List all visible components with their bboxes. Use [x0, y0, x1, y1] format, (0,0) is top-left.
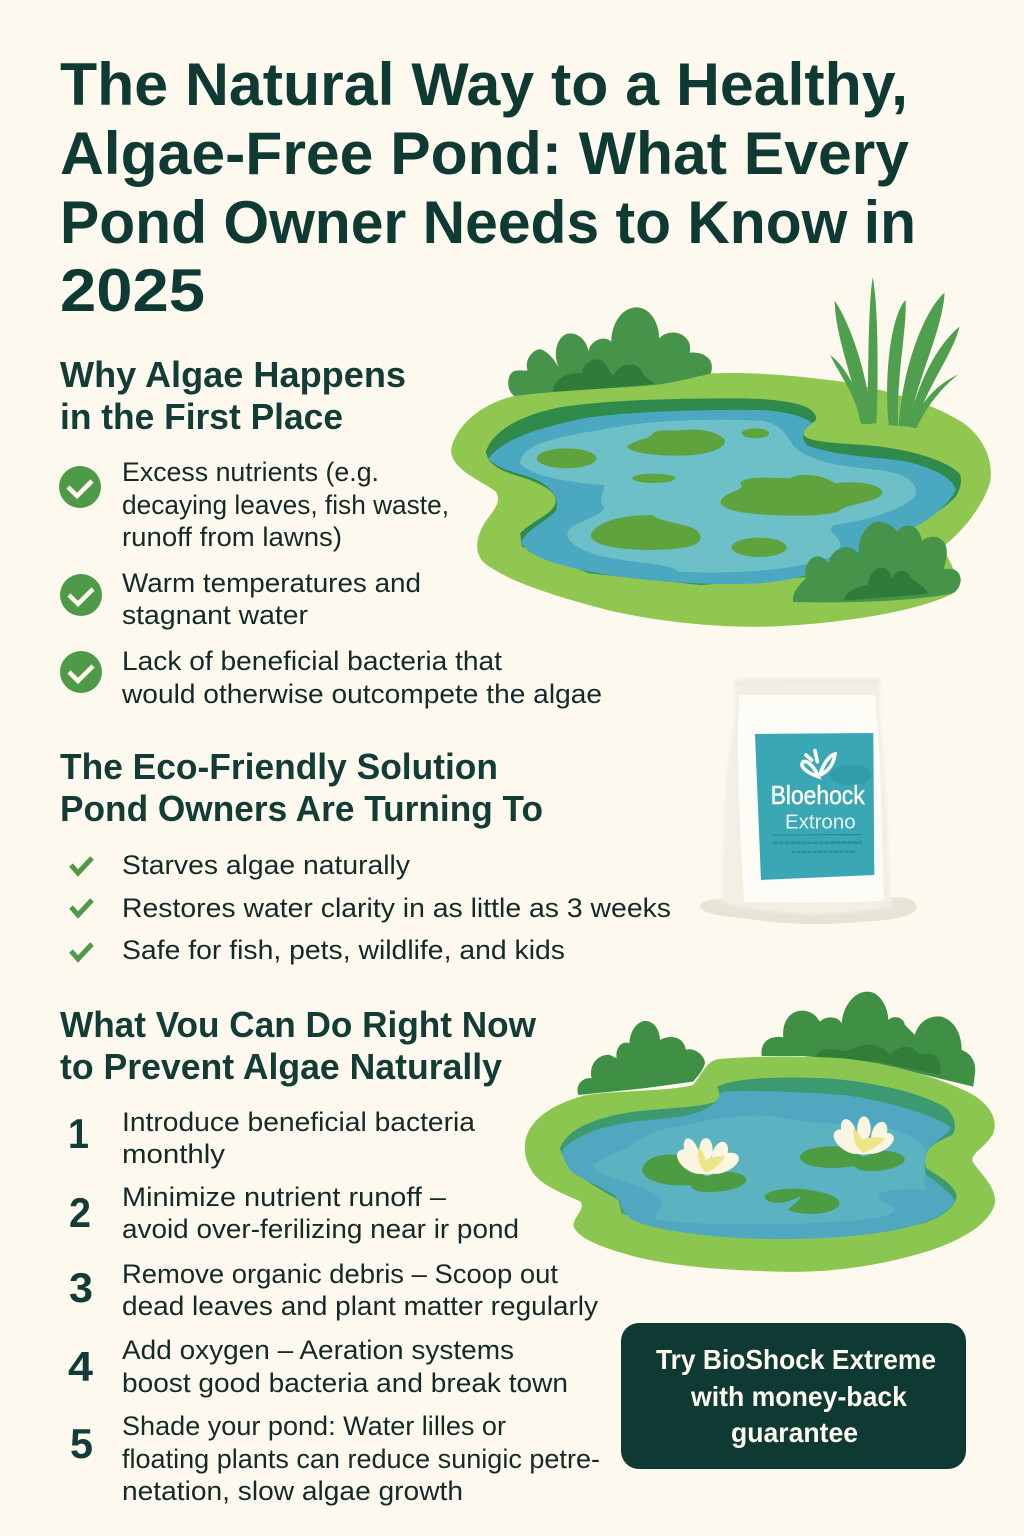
- section heading: why algae happens: in the First Place: [60, 396, 343, 437]
- section heading: what you can do: to Prevent Algae Naturally: [60, 1046, 502, 1087]
- title: 2025: [60, 257, 205, 324]
- water lily left: [673, 1136, 742, 1179]
- bag body: [738, 695, 884, 903]
- bush: back left: [577, 1021, 705, 1095]
- lily pads: [642, 1146, 905, 1214]
- step 3 text: dead leaves and plant matter regularly: [122, 1291, 599, 1321]
- bush shadow: [844, 568, 928, 601]
- section heading: why algae happens: [60, 354, 406, 437]
- cause 1: [122, 457, 449, 552]
- water lily right: [829, 1116, 897, 1159]
- reeds: [830, 277, 959, 428]
- step number 5: 5: [70, 1420, 93, 1467]
- section heading: eco-friendly solution: Pond Owners Are Turning To: [60, 788, 543, 829]
- step 2 text: avoid over-ferilizing near ir pond: [122, 1214, 519, 1244]
- cause 1: runoff from lawns): [122, 522, 342, 552]
- cause 2: stagnant water: [122, 600, 308, 630]
- bush shadow: [815, 1045, 940, 1075]
- step 4 text: Add oxygen – Aeration systems: [122, 1335, 514, 1365]
- benefit 2: Restores water clarity in as little as 3 weeks: [122, 893, 671, 923]
- step 1 text: [122, 1107, 476, 1169]
- benefit 1: Starves algae naturally: [122, 850, 411, 880]
- bag subtitle: Extrono: [785, 811, 856, 833]
- section heading: eco-friendly solution: [60, 746, 543, 829]
- grass bank: [525, 1056, 995, 1272]
- illustration: lily pond: [525, 992, 995, 1272]
- icon: check circle 1: [59, 466, 101, 508]
- cause 3: Lack of beneficial bacteria that: [122, 646, 503, 676]
- cause 3: [121, 646, 602, 709]
- cause 1: decaying leaves, fish waste,: [122, 490, 449, 520]
- bag logo: [802, 751, 835, 777]
- icon: check 2: [71, 900, 92, 915]
- step 4 text: [122, 1335, 568, 1398]
- step 3 text: Remove organic debris – Scoop out: [122, 1259, 559, 1289]
- list: benefits: [71, 850, 671, 965]
- bag name: Bloehock: [771, 780, 866, 810]
- step number 1: 1: [68, 1110, 89, 1157]
- cause 3: would otherwise outcompete the algae: [121, 679, 602, 709]
- step 2 text: Minimize nutrient runoff –: [122, 1182, 446, 1212]
- step 1 text: Introduce beneficial bacteria: [122, 1107, 476, 1137]
- icon: check 3: [71, 944, 92, 959]
- illustration: product bag: [700, 678, 917, 924]
- pond rim: [560, 1077, 957, 1238]
- icon: check circle 3: [60, 651, 102, 693]
- step 5 text: floating plants can reduce sunigic petre-: [122, 1444, 600, 1474]
- icon: check circle 2: [60, 574, 102, 616]
- title: Algae-Free Pond: What Every: [60, 120, 910, 187]
- step 5 text: [122, 1411, 600, 1506]
- step 3 text: [122, 1259, 599, 1321]
- cause 2: Warm temperatures and: [122, 568, 421, 598]
- cause 2: [122, 568, 421, 630]
- bush shadow: [553, 359, 655, 393]
- step number 3: 3: [69, 1264, 93, 1311]
- step 5 text: netation, slow algae growth: [122, 1476, 463, 1506]
- callout button: [621, 1323, 966, 1469]
- algae patches: [537, 428, 882, 557]
- title: [60, 51, 916, 324]
- list: causes of algae: [59, 457, 602, 709]
- title: Pond Owner Needs to Know in: [60, 189, 916, 256]
- pond rim: [486, 398, 961, 585]
- callout button: guarantee: [731, 1417, 858, 1448]
- pond water light: [593, 1116, 927, 1224]
- step 2 text: [122, 1182, 519, 1244]
- bush: back right: [761, 992, 975, 1087]
- section heading: what you can do: [60, 1004, 537, 1087]
- bag shadow: [700, 897, 917, 924]
- section heading: what you can do: What Vou Can Do Right Now: [60, 1004, 537, 1045]
- pond water light: [520, 420, 916, 572]
- icon: check 1: [71, 858, 92, 873]
- section heading: eco-friendly solution: The Eco-Friendly Solution: [60, 746, 498, 787]
- bush: back left: [508, 307, 712, 396]
- cause 1: Excess nutrients (e.g.: [122, 457, 379, 487]
- step 5 text: Shade your pond: Water lilles or: [122, 1411, 506, 1441]
- grass bank: [451, 373, 991, 627]
- section heading: why algae happens: Why Algae Happens: [60, 354, 406, 395]
- numbered list: prevention steps: [68, 1107, 600, 1506]
- step 1 text: monthly: [122, 1139, 226, 1169]
- illustration: algae pond: [451, 277, 991, 627]
- step 4 text: boost good bacteria and break town: [122, 1368, 568, 1398]
- callout button: Try BioShock Extreme: [656, 1344, 936, 1375]
- pond water deep: [562, 1091, 955, 1239]
- step number 4: 4: [68, 1343, 94, 1390]
- bag top seal: [735, 678, 879, 687]
- bag side shading: [722, 678, 892, 914]
- bag label: [755, 733, 874, 880]
- callout button: with money-back: [690, 1381, 908, 1412]
- step number 2: 2: [69, 1189, 91, 1236]
- benefit 3: Safe for fish, pets, wildlife, and kids: [122, 935, 565, 965]
- bush: front right: [793, 522, 961, 602]
- pond water deep: [488, 410, 956, 584]
- title: The Natural Way to a Healthy,: [60, 51, 908, 118]
